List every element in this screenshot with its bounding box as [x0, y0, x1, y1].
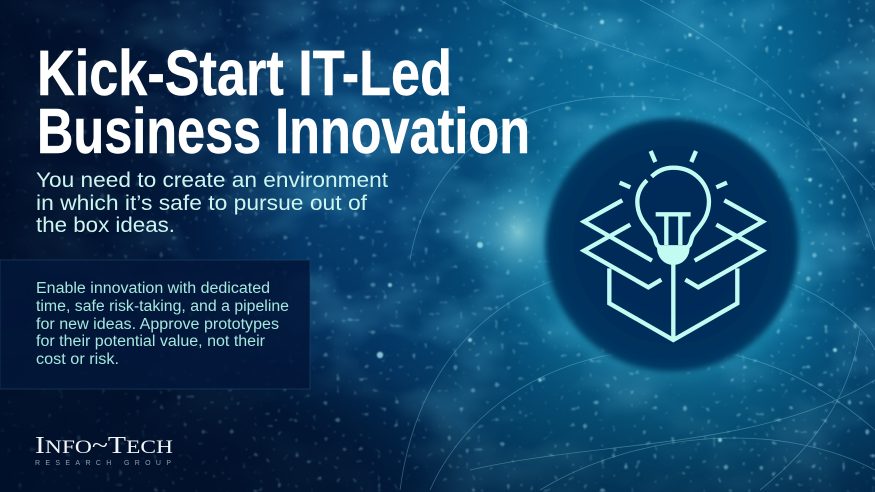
panel: summary callout [0, 260, 310, 389]
bulb rays [620, 151, 727, 187]
title: Business Innovation [37, 95, 530, 167]
callout text: Enable innovation with dedicated [36, 280, 270, 297]
title [37, 37, 530, 167]
subtitle: in which it’s safe to pursue out of [36, 191, 367, 215]
box left flaps [584, 200, 661, 287]
callout text: cost or risk. [36, 351, 119, 368]
callout text [36, 280, 289, 368]
logo: Info~Tech Research Group: RESEARCH GROUP [35, 460, 171, 467]
callout text: for new ideas. Approve prototypes [36, 316, 279, 333]
bulb outline [637, 168, 709, 247]
bulb base [657, 247, 690, 265]
subtitle: the box ideas. [36, 213, 175, 237]
box right flaps [685, 200, 763, 287]
icon: light bulb rising from open box [584, 151, 763, 340]
subtitle [36, 168, 388, 237]
box body [609, 268, 737, 340]
callout text: time, safe risk-taking, and a pipeline [36, 298, 289, 315]
dark circular portal behind icon [545, 118, 799, 372]
logo: Info~Tech Research Group: INFO ~T ECH [35, 433, 173, 459]
title: Kick-Start IT-Led [37, 37, 452, 109]
bulb filament [656, 214, 691, 245]
subtitle: You need to create an environment [36, 168, 388, 192]
callout text: for their potential value, not their [36, 333, 265, 350]
box centre seam [667, 262, 680, 340]
